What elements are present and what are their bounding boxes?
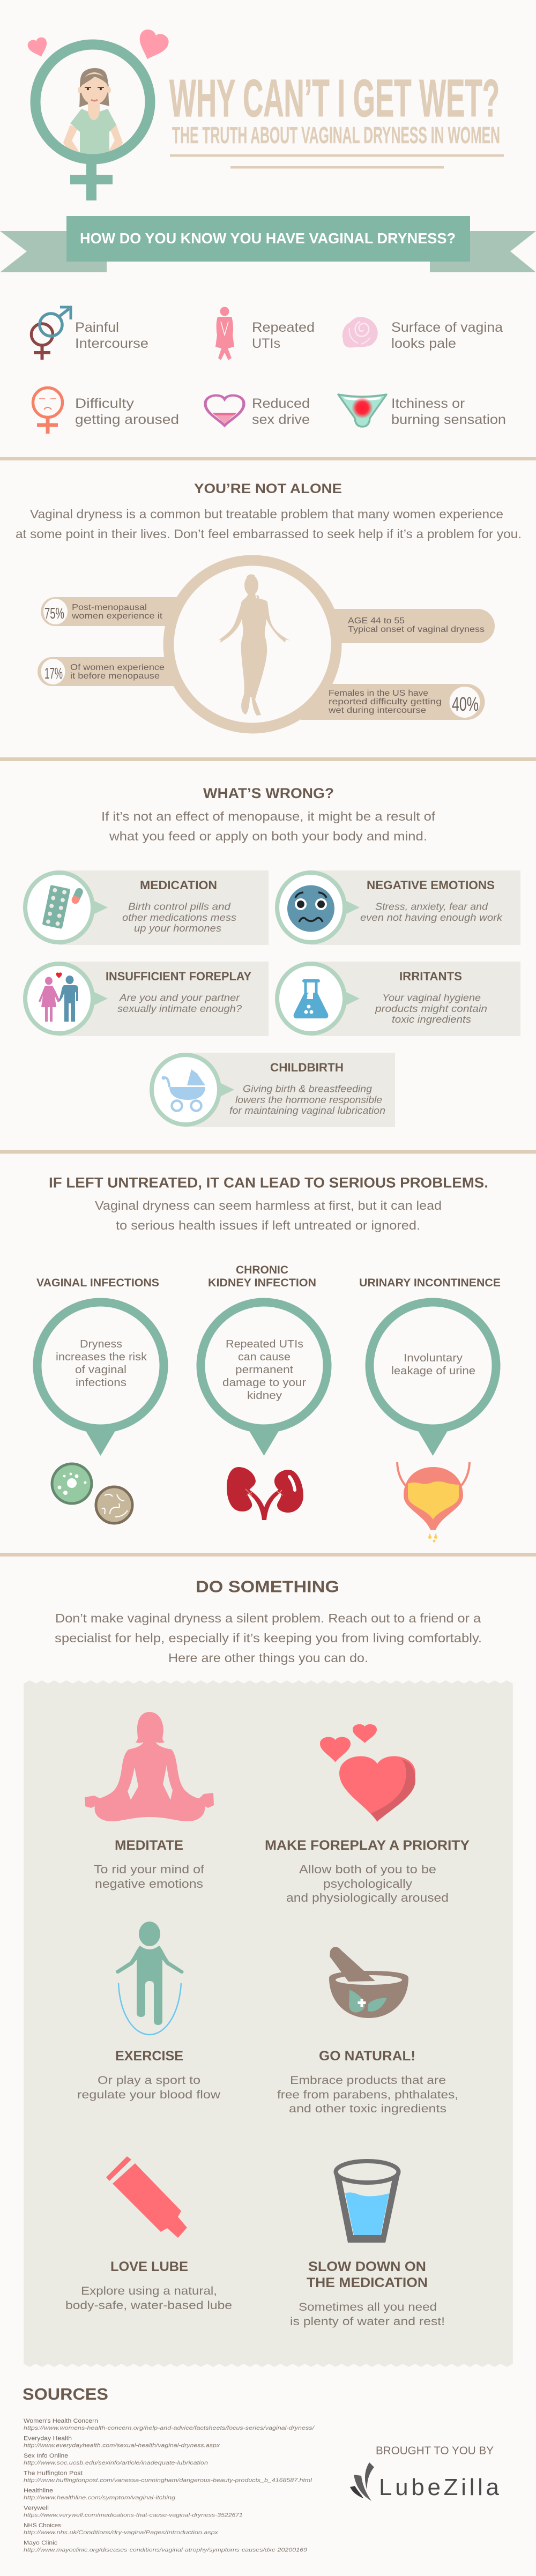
stat: 75% [43,599,163,624]
symptom: painful intercourse [31,307,148,360]
icon: microbes [52,1464,132,1523]
symptom: painful intercourse: Painful [75,320,119,335]
column: vaginal infections [36,1277,164,1523]
callout ring: kidney [247,1390,282,1402]
banner: how do you know [0,216,536,272]
heading: do something: DO SOMETHING [196,1577,339,1596]
item: meditate: MEDITATE [115,1838,183,1853]
symptom: reduced sex drive [205,396,310,427]
stat: 40%: reported difficulty getting [329,697,442,706]
icon: glass of water [334,2161,400,2243]
item: go natural: free from parabens, phthalates, [277,2089,458,2101]
card: medication: up your hormones [134,923,221,934]
text: what's wrong intro: If it’s not an effect of menopause, it might be a result of [101,809,436,823]
stat: age 44 to 55: AGE 44 to 55 [348,616,405,626]
card: irritants: toxic ingredients [392,1014,471,1025]
item: love lube: body-safe, water-based lube [65,2299,232,2312]
source list: http://www.healthline.com/symptom/vaginal-itching [24,2495,175,2501]
heading: you're not alone: YOU’RE NOT ALONE [194,481,342,496]
icon: meditating woman [85,1712,214,1821]
symptom: pale surface: looks pale [391,336,456,351]
stat: 75%: Post-menopausal [72,603,147,612]
icon: LubeZilla logo mark [350,2462,374,2501]
icon: low heart [205,396,244,426]
callout ring: permanent [235,1364,293,1376]
column: chronic kidney infection: CHRONIC [236,1264,288,1276]
symptom: itchiness: Itchiness or [391,396,465,411]
symptom: itchiness: burning sensation [391,412,506,427]
card: insufficient foreplay [25,962,269,1036]
source list: https://www.womens-health-concern.org/help-and-advice/factsheets/focus-series/vaginal-dryness/ [24,2425,315,2431]
heading: if left untreated: IF LEFT UNTREATED, IT CAN LEAD TO SERIOUS PROBLEMS. [49,1175,488,1191]
column: urinary incontinence [359,1277,501,1543]
source list: http://www.soc.ucsb.edu/sexinfo/article/inadequate-lubrication [24,2460,208,2466]
source list: http://www.nhs.uk/Conditions/dry-vagina/Pages/Introduction.aspx [24,2529,219,2536]
symptom: difficulty getting aroused: getting aroused [75,412,179,427]
card: childbirth: lowers the hormone responsible [235,1095,382,1105]
symptom: pale surface: Surface of vagina [391,320,503,335]
card: medication [25,870,269,945]
card: negative emotions: Stress, anxiety, fear and [375,902,488,912]
item: go natural: GO NATURAL! [319,2049,415,2064]
callout ring: Dryness [80,1338,122,1350]
callout ring: can cause [238,1351,291,1363]
source list: Women's Health Concern [24,2418,98,2424]
text: what's wrong intro [101,809,436,843]
item: love lube [65,2156,232,2312]
credit: brought to you by LubeZilla [350,2445,500,2501]
item: foreplay: and physiologically aroused [286,1891,449,1904]
icon: flask [294,981,328,1018]
banner: how do you know: HOW DO YOU KNOW YOU HAVE VAGINAL DRYNESS? [80,230,456,247]
card: negative emotions: NEGATIVE EMOTIONS [367,878,495,892]
item: slow down on the medication: Sometimes all you need [299,2301,437,2313]
icon: woman portrait [63,68,123,155]
source list: http://www.huffingtonpost.com/vanessa-cunningham/dangerous-beauty-products_b_4168587.html [24,2477,312,2484]
card: insufficient foreplay: sexually intimate enough? [117,1003,242,1014]
column: vaginal infections: VAGINAL INFECTIONS [36,1277,159,1289]
source list: https://www.verywell.com/medications-that-cause-vaginal-dryness-3522671 [24,2512,243,2518]
stat: 40%: 40% [452,693,479,715]
card: insufficient foreplay: Are you and your partner [119,993,240,1003]
card: insufficient foreplay: INSUFFICIENT FOREPLAY [106,970,251,983]
item: slow down on the medication [290,2161,445,2328]
header illustration: female symbol with woman [26,27,171,200]
column: urinary incontinence: URINARY INCONTINENCE [359,1277,501,1289]
item: foreplay: psychologically [323,1877,412,1890]
panel: things you can do [24,1680,513,2367]
icon: small heart [26,36,50,59]
ring with silhouette [168,561,337,728]
callout ring [200,1302,327,1456]
card: medication: MEDICATION [140,878,217,892]
stat: 40%: wet during intercourse [328,706,426,715]
sources [23,2385,315,2553]
source list: NHS Choices [24,2522,62,2529]
card: medication: Birth control pills and [128,902,231,912]
callout ring [38,1302,164,1456]
symptom: repeated UTIs [215,307,315,360]
stat: 40%: Females in the US have [329,689,428,698]
symptom: reduced sex drive: Reduced [252,396,310,411]
symptom: difficulty getting aroused: Difficulty [75,396,135,411]
item: love lube: Explore using a natural, [81,2285,217,2297]
item: love lube: LOVE LUBE [110,2259,188,2274]
card: medication: other medications mess [122,912,236,923]
card: childbirth: CHILDBIRTH [270,1061,344,1074]
symptom: pale surface [343,317,503,351]
icon: large heart [133,27,171,64]
icon: pills [42,885,84,929]
item: meditate: negative emotions [95,1877,203,1890]
column: chronic kidney infection [200,1264,327,1520]
text: intro [16,507,522,541]
card: negative emotions: even not having enough work [360,912,503,923]
icon: hearts [320,1724,415,1822]
callout ring: Involuntary [404,1352,463,1364]
text: what's wrong intro: what you feed or apply on both your body and mind. [109,829,427,843]
card: irritants: products might contain [375,1003,487,1014]
source list: Sex Info Online [24,2453,68,2459]
symptom: repeated UTIs: Repeated [252,320,315,335]
callout ring: infections [76,1377,126,1389]
icon: rose [343,317,378,347]
text: do something intro: Here are other things you can do. [168,1651,368,1665]
title [169,69,504,168]
source list: http://www.mayoclinic.org/diseases-conditions/vaginal-atrophy/symptoms-causes/dxc-20200169 [24,2547,307,2553]
card: negative emotions [277,870,520,945]
source list: http://www.everydayhealth.com/sexual-health/vaginal-dryness.aspx [24,2442,220,2448]
item: foreplay [265,1724,470,1904]
stat: 75%: women experience it [71,612,163,621]
callout ring: of vaginal [75,1364,126,1376]
card: childbirth [152,1053,395,1127]
text: do something intro: Don’t make vaginal dryness a silent problem. Reach out to a friend or a [55,1611,481,1625]
card: irritants: IRRITANTS [399,970,462,983]
credit: brought to you by LubeZilla: BROUGHT TO YOU BY [376,2445,494,2457]
source list: Verywell [24,2505,49,2512]
item: exercise: EXERCISE [115,2049,183,2064]
icon: gender symbols [31,307,71,360]
item: exercise: regulate your blood flow [77,2089,221,2101]
stat: 17% [41,659,165,684]
card: childbirth: for maintaining vaginal lubrication [229,1105,385,1116]
symptom: difficulty getting aroused [33,388,179,434]
card: irritants [277,962,520,1036]
icon: stroller [162,1069,205,1111]
item: go natural: Embrace products that are [290,2074,446,2087]
text: untreated intro [95,1198,442,1232]
source list [24,2418,315,2553]
item: exercise: Or play a sport to [98,2074,200,2087]
text: intro: Vaginal dryness is a common but treatable problem that many women experience [30,507,503,521]
item: foreplay: Allow both of you to be [299,1863,436,1876]
icon: worried face [287,885,334,932]
text: intro: at some point in their lives. Don’t feel embarrassed to seek help if it’s a problem for you. [16,527,522,541]
stat: age 44 to 55 [348,616,485,634]
item: go natural: and other toxic ingredients [289,2103,446,2115]
source list: Healthline [24,2488,53,2494]
icon: woman crossing legs [215,307,234,360]
icon: female symbol ring [35,44,150,200]
item: foreplay: MAKE FOREPLAY A PRIORITY [265,1838,470,1853]
icon: mortar and pestle [329,1947,408,2018]
callout ring: damage to your [222,1377,306,1389]
symptom: repeated UTIs: UTIs [252,336,280,351]
symptom: reduced sex drive: sex drive [252,412,310,427]
symptom: painful intercourse: Intercourse [75,336,148,351]
icon: sad female symbol [33,388,62,434]
callout ring: Repeated UTIs [226,1338,303,1350]
card: irritants: Your vaginal hygiene [382,993,481,1003]
text: do something intro: specialist for help, especially if it’s keeping you from living comfortably. [55,1631,482,1645]
callout ring: leakage of urine [391,1365,475,1377]
sources: SOURCES [23,2385,108,2403]
icon: lube tube [106,2156,187,2238]
source list: Everyday Health [24,2436,72,2442]
item: slow down on the medication: THE MEDICATION [307,2275,428,2290]
icon: jump rope figure [116,1922,183,2035]
text: untreated intro: to serious health issues if left untreated or ignored. [116,1218,420,1232]
symptom: itchiness [338,394,506,427]
callout ring [370,1302,496,1456]
stat pills [38,597,495,720]
source list: The Huffington Post [24,2470,83,2476]
stat: 17%: Of women experience [70,663,165,672]
callout ring: increases the risk [56,1351,147,1363]
source list: Mayo Clinic [24,2540,58,2546]
item: exercise [77,1922,221,2101]
icon: couple [39,972,78,1022]
heading: what's wrong: WHAT’S WRONG? [203,785,334,801]
credit: brought to you by LubeZilla: LubeZilla [379,2474,500,2500]
column: chronic kidney infection: KIDNEY INFECTION [208,1277,316,1289]
text: do something intro [55,1611,482,1665]
item: go natural [277,1947,458,2115]
stat: 40% [328,687,480,718]
item: meditate: To rid your mind of [94,1863,205,1876]
item: meditate [85,1712,214,1890]
text: untreated intro: Vaginal dryness can seem harmless at first, but it can lead [95,1198,442,1212]
icon: underwear with red spot [338,394,386,427]
icon: kidneys [227,1467,303,1520]
stat: 17%: 17% [44,665,63,682]
item: slow down on the medication: is plenty of water and rest! [290,2316,445,2328]
item: slow down on the medication: SLOW DOWN ON [308,2259,426,2274]
icon: bladder [397,1462,470,1543]
card: childbirth: Giving birth & breastfeeding [243,1084,372,1095]
stat: age 44 to 55: Typical onset of vaginal dryness [348,625,485,634]
stat: 17%: it before menopause [70,672,160,681]
stat: 75%: 75% [44,605,64,622]
stats diagram [38,561,495,728]
